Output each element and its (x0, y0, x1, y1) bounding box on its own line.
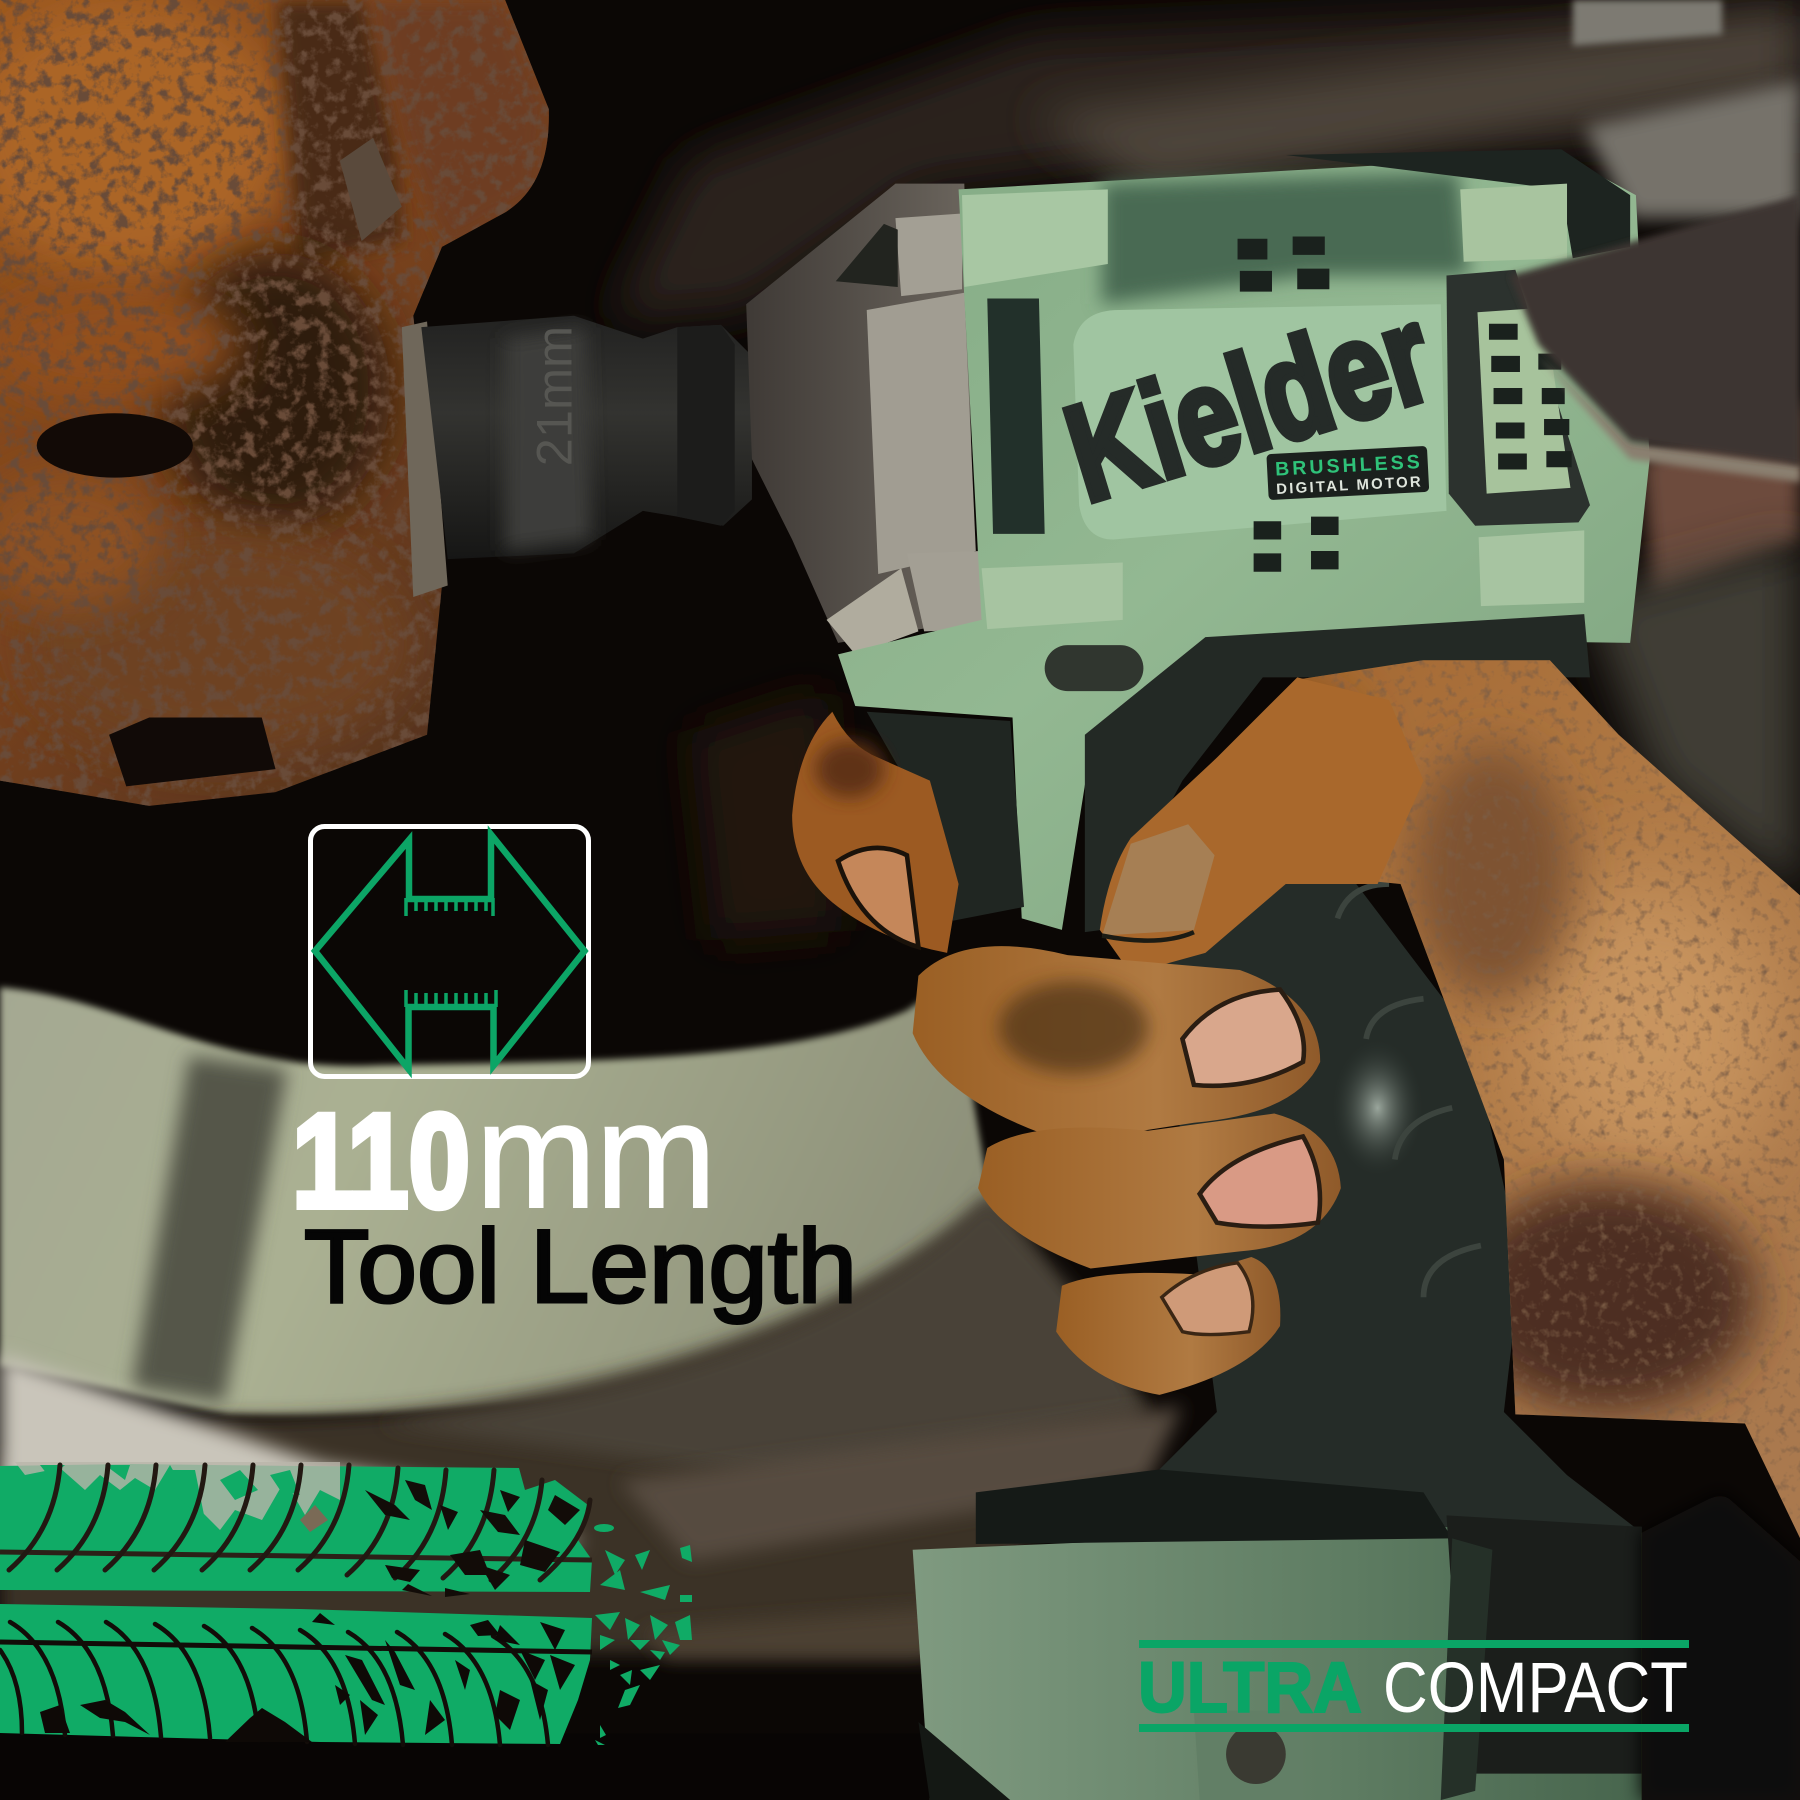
hand: index finger (913, 946, 1320, 1142)
stat label: Tool Length: Tool Length (304, 1209, 857, 1325)
stat unit: mm: mm (476, 1071, 716, 1239)
tyre: lower tread grooves (0, 1622, 548, 1745)
tyre: worn light patches upper (0, 1462, 340, 1530)
stat icon: tool length arrows in rounded box (310, 826, 588, 1076)
tool: brushless badge: DIGITAL MOTOR (1276, 473, 1421, 498)
impact socket 21mm (402, 316, 752, 597)
hand: ring finger (1056, 1257, 1280, 1395)
tyre: upper band (0, 1464, 592, 1592)
tool: lower vents (1254, 517, 1339, 572)
tyre: upper tread grooves (9, 1465, 590, 1580)
hand: wrist fade into dark (1642, 1492, 1800, 1800)
tool: black collar (1085, 614, 1590, 932)
badge word ULTRA: ULTRA (1138, 1649, 1362, 1728)
hand: back of hand and wrist (1302, 660, 1800, 1538)
tool: top vents (1238, 236, 1329, 292)
icon: upper ruler ticks (406, 898, 493, 916)
tool: housing (838, 155, 1650, 930)
icon: double headed arrow outline (315, 834, 584, 1069)
badge bottom rule (1139, 1724, 1689, 1732)
tool: battery pack (913, 1527, 1642, 1800)
hand: left thumb tip (792, 712, 959, 953)
gloved arm blur right (1510, 195, 1800, 482)
tyre: lower horizontal groove (0, 1642, 592, 1652)
tool: logo: Kielder (1050, 276, 1448, 532)
impact wrench body (746, 149, 1800, 1800)
badge top rule (1139, 1640, 1689, 1648)
hand: thumb (1100, 677, 1424, 974)
icon frame (310, 826, 588, 1076)
icon: lower ruler ticks (406, 990, 496, 1007)
tool: forward reverse switch (1045, 645, 1143, 691)
tool: side vent panel (1446, 270, 1590, 526)
mechanic's dirty hand (792, 643, 1800, 1800)
tyre: lower band (0, 1604, 592, 1744)
tyre: worn dark fragments lower (40, 1613, 575, 1742)
hand: middle finger (978, 1114, 1341, 1269)
tool: brushless badge: BRUSHLESS (1275, 451, 1420, 481)
stat value: 110: 110 (292, 1087, 470, 1236)
tyre: scattered fragments right (595, 1545, 692, 1745)
rusty suspension bracket (0, 0, 574, 815)
badge word COMPACT: COMPACT (1383, 1649, 1688, 1728)
tyre tread graphic (0, 1462, 692, 1745)
badge: ULTRA COMPACT (1138, 1640, 1689, 1732)
tyre: worn dark fragments upper (365, 1480, 580, 1597)
tool: nose cone (746, 184, 976, 643)
impact socket 21mm: 21mm (526, 326, 583, 466)
tool: brushless badge (1266, 446, 1429, 500)
tool: grip (1148, 867, 1642, 1800)
tyre: upper horizontal groove (0, 1552, 592, 1560)
